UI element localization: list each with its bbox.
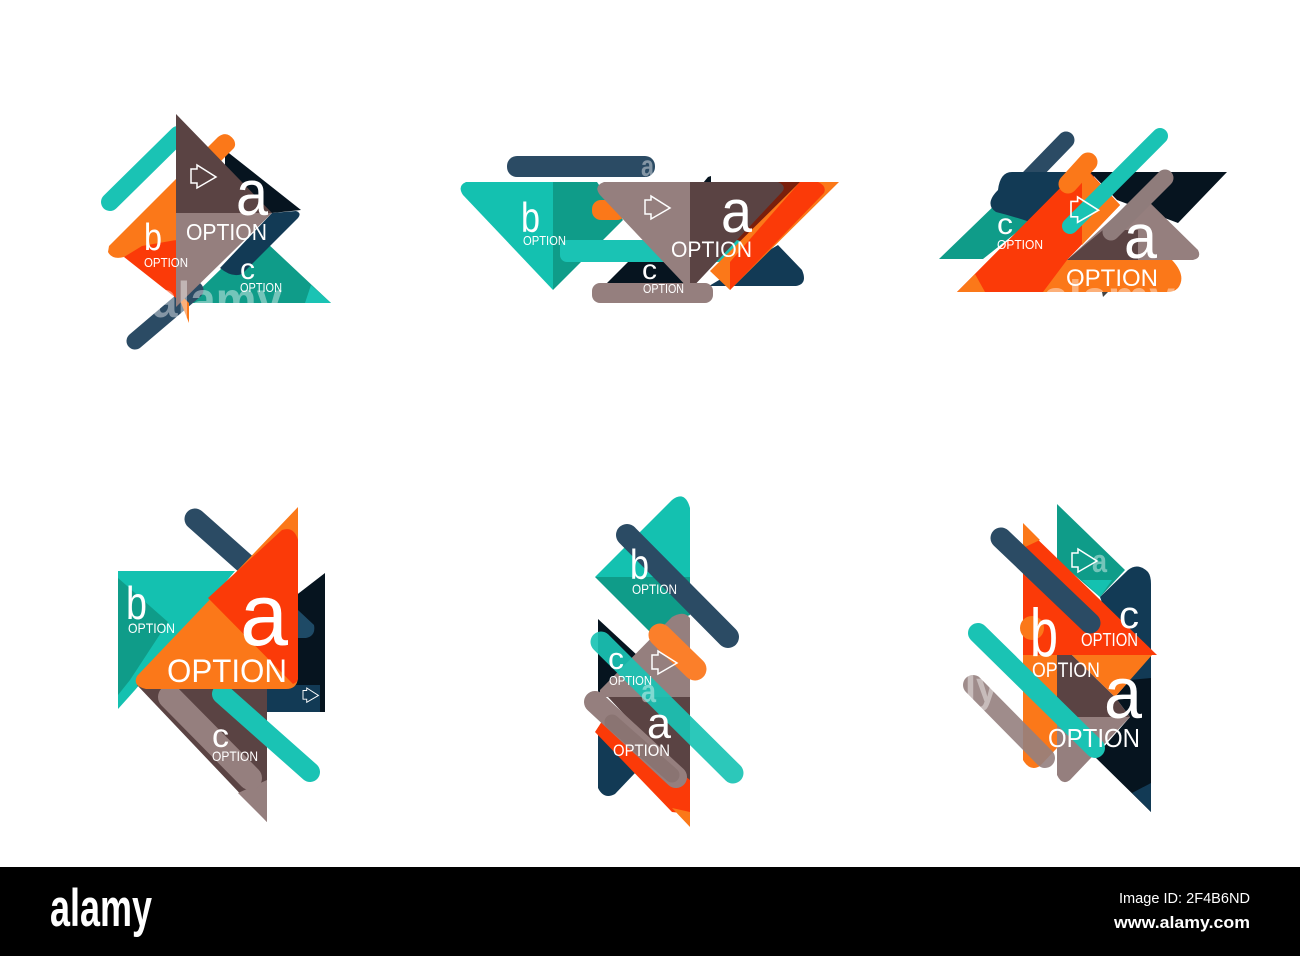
brown triangle	[690, 182, 784, 290]
footer bar	[0, 867, 1300, 956]
label option a: OPTION	[1048, 723, 1140, 753]
teal corner	[305, 285, 331, 303]
red stripe	[730, 182, 825, 290]
navy tip	[1132, 783, 1151, 812]
label option b: OPTION	[523, 233, 566, 248]
brown block	[1057, 655, 1130, 717]
label option b: OPTION	[1032, 659, 1100, 682]
orange right facet	[1082, 165, 1120, 245]
orange tip	[176, 290, 189, 323]
grey pill	[592, 283, 713, 303]
letter a: a	[1124, 203, 1157, 272]
arrow icon	[1072, 549, 1097, 572]
navy triangle	[598, 727, 635, 796]
green triangle	[553, 182, 623, 290]
grey triangle	[176, 213, 272, 307]
grey triangle	[597, 182, 690, 290]
letter c: c	[997, 208, 1013, 241]
navy pill	[1001, 538, 1090, 623]
website: www.alamy.com	[1113, 913, 1250, 932]
teal block	[118, 571, 235, 709]
panel: bottom centre option graphic	[595, 496, 733, 827]
orange stripe	[710, 182, 839, 290]
letter b: b	[521, 194, 540, 241]
navy pill	[627, 535, 728, 637]
orange tip	[672, 808, 690, 827]
letter a: a	[236, 157, 268, 229]
orange tip	[1023, 523, 1040, 548]
red facet	[208, 529, 298, 684]
letter c: c	[608, 641, 624, 676]
grey pill	[1111, 178, 1165, 232]
letter c: c	[1119, 595, 1139, 637]
orange band	[108, 134, 235, 258]
teal pill	[110, 135, 178, 202]
navy band	[200, 685, 320, 712]
label option a: OPTION	[186, 219, 267, 245]
letter c: c	[212, 717, 229, 754]
panel: top centre option graphic	[461, 150, 839, 303]
image id: Image ID: 2F4B6ND	[1119, 890, 1250, 907]
teal pill	[222, 694, 310, 772]
letter b: b	[630, 541, 649, 588]
grey hexagon	[600, 614, 690, 697]
label option c: OPTION	[1081, 630, 1138, 650]
footer logo: alamy	[50, 879, 152, 938]
navy inner chip	[298, 610, 314, 638]
orange pill	[1068, 162, 1088, 184]
letter a: a	[647, 699, 672, 748]
navy block	[990, 172, 1100, 222]
teal pill	[1070, 136, 1160, 226]
brown block	[608, 697, 690, 785]
panel: bottom right option graphic	[965, 504, 1157, 812]
arrow icon	[652, 651, 677, 674]
letter c: c	[642, 254, 657, 285]
label option c: OPTION	[643, 281, 684, 296]
label option a: OPTION	[671, 237, 752, 262]
label option a: OPTION	[613, 741, 670, 760]
panel: top right option graphic	[939, 136, 1227, 325]
arrow icon	[191, 165, 216, 188]
teal bar	[560, 240, 743, 262]
navy pill	[507, 156, 655, 177]
teal pill	[978, 633, 1095, 748]
navy band	[220, 211, 300, 275]
label option a: OPTION	[1066, 265, 1158, 292]
red block	[124, 240, 176, 298]
watermark letter: a	[641, 673, 656, 709]
grey pill	[170, 697, 250, 778]
letter a: a	[721, 178, 753, 245]
brown triangle	[176, 114, 272, 213]
black block	[290, 573, 325, 712]
grey pill	[595, 702, 676, 777]
arrow icon	[1071, 197, 1098, 222]
brown triangle	[137, 685, 267, 822]
grey pill	[973, 685, 1045, 758]
label option b: OPTION	[632, 581, 677, 597]
label option c: OPTION	[212, 748, 258, 764]
letter b: b	[144, 217, 162, 259]
navy pill	[1000, 140, 1066, 208]
navy pill	[135, 290, 195, 341]
letter c: c	[240, 253, 255, 286]
orange triangle	[136, 507, 298, 689]
watermark letters ly: ly	[965, 663, 998, 712]
red triangle	[1023, 530, 1157, 655]
panel: top left option graphic	[108, 114, 331, 341]
inner pill	[612, 722, 672, 775]
label option c: OPTION	[609, 673, 652, 688]
black triangle	[1095, 678, 1151, 812]
orange band	[1043, 260, 1181, 292]
letter a: a	[1104, 654, 1143, 734]
green triangle	[1057, 504, 1125, 597]
black tip	[703, 176, 711, 183]
label option b: OPTION	[144, 255, 188, 270]
label option c: OPTION	[240, 280, 282, 295]
arrow icon	[303, 688, 318, 702]
teal triangle	[595, 496, 690, 577]
grey triangle	[1067, 193, 1199, 260]
letter b: b	[126, 577, 147, 629]
label option b: OPTION	[128, 620, 175, 636]
black block	[1090, 172, 1227, 223]
navy triangle	[709, 245, 804, 286]
small dark mark	[1102, 292, 1108, 297]
navy triangle	[1100, 566, 1151, 682]
teal triangle	[461, 182, 553, 290]
teal corner	[1082, 580, 1112, 597]
orange bump	[1020, 616, 1044, 640]
brown facet	[1067, 230, 1138, 260]
black triangle	[607, 260, 695, 283]
black triangle	[598, 619, 650, 695]
label option c: OPTION	[997, 237, 1043, 252]
watermark: alamy	[1043, 272, 1175, 325]
orange chip	[592, 200, 626, 220]
grey tip	[238, 780, 267, 822]
green triangle	[595, 577, 690, 632]
orange pill	[660, 635, 695, 669]
green triangle	[186, 243, 331, 303]
orange band	[1023, 655, 1152, 697]
navy pill	[195, 519, 258, 575]
orange tip	[957, 274, 985, 292]
letter a: a	[240, 565, 288, 664]
black triangle	[225, 150, 301, 213]
watermark: alamy	[152, 272, 282, 328]
arrow icon	[645, 196, 670, 219]
panel: bottom left option graphic	[118, 507, 325, 822]
red triangle	[957, 165, 1120, 292]
green facet	[118, 578, 168, 695]
green triangle	[939, 200, 1032, 259]
letter b: b	[1030, 595, 1058, 671]
teal pill	[601, 642, 733, 773]
watermark letter: a	[641, 150, 654, 183]
dark red strip	[715, 182, 806, 262]
red strip	[595, 715, 690, 814]
grey triangle	[1057, 717, 1130, 782]
label option a: OPTION	[167, 653, 287, 689]
orange column	[1023, 655, 1057, 768]
watermark letter a: a	[1092, 543, 1107, 579]
